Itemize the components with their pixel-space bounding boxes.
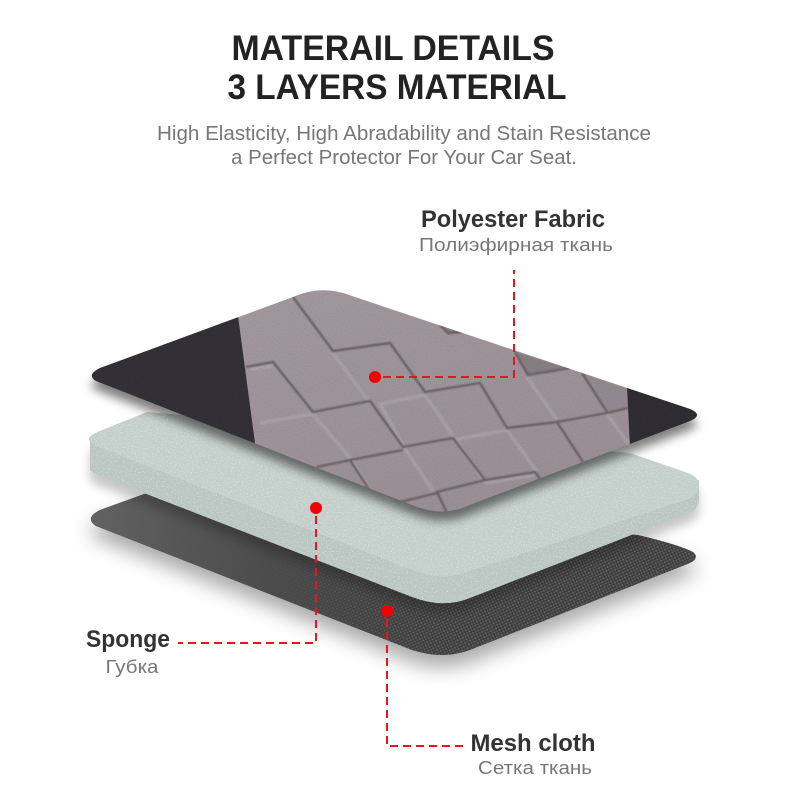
callout: mesh cloth [381,605,596,778]
callout: sponge [86,502,322,677]
layer: sponge [89,412,699,613]
fabric dark seams [246,297,628,513]
dashed leader [178,516,316,643]
sponge top surface [89,412,699,576]
layer: mesh cloth [91,493,696,667]
title [228,29,566,107]
sponge side [90,440,699,603]
label: Polyester Fabric [421,206,605,233]
callout: polyester fabric [369,206,613,383]
subtitle: High Elasticity, High Abradability and Stain Resistance [157,123,651,145]
label: Mesh cloth [470,730,596,757]
subtitle [157,123,651,169]
marker dot [381,605,393,617]
subtitle: a Perfect Protector For Your Car Seat. [231,147,577,169]
label: Sponge [86,626,170,653]
fabric darker panels [442,326,626,406]
marker dot [310,502,322,514]
fabric dark corner left [92,317,255,443]
callout: mesh cloth: Сетка ткань [478,758,592,778]
dashed leader [383,270,514,377]
layer: polyester fabric [70,290,710,520]
fabric light seams [250,353,630,491]
callout: polyester fabric: Полиэфирная ткань [419,235,613,255]
title: MATERAIL DETAILS [232,29,554,68]
title: 3 LAYERS MATERIAL [228,68,566,107]
marker dot [369,371,381,383]
callout: sponge: Губка [106,657,160,677]
fabric dark corner right [627,388,697,444]
dashed leader [387,619,467,746]
sponge texture [90,412,699,603]
